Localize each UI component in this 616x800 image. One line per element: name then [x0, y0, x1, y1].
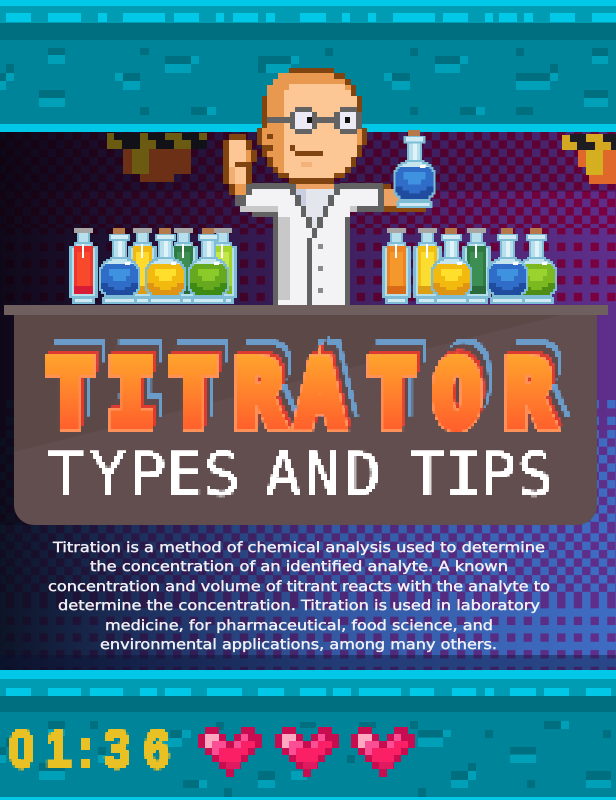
scientist forearm [383, 184, 426, 212]
faded block left [107, 133, 207, 182]
tall lime bottle [208, 228, 237, 304]
bright block right [562, 134, 616, 184]
intro paragraph: determine the concentration. Titration is used in laboratory [58, 598, 540, 614]
intro paragraph [48, 540, 550, 653]
yellow flask [431, 228, 472, 304]
bottom game band [0, 670, 616, 800]
scientist glasses [267, 107, 362, 134]
lab coat [235, 183, 384, 305]
heart: life one [198, 727, 262, 777]
timer 01:36: 01:36 [9, 719, 170, 779]
flask held by scientist [393, 130, 436, 208]
left bottles group [69, 228, 237, 304]
yellow flask [145, 228, 186, 304]
blue flask [487, 228, 528, 304]
tall dark green bottle [462, 228, 491, 304]
intro paragraph: Titration is a method of chemical analysis used to determine [52, 540, 545, 556]
subtitle: TYPES AND TIPS: TYPES AND TIPS [47, 440, 553, 510]
tall orange bottle [382, 228, 411, 304]
intro paragraph: medicine, for pharmaceutical, food science, and [105, 618, 493, 634]
green flask [516, 228, 557, 304]
tall yellow bottle [128, 228, 157, 304]
intro paragraph: concentration and volume of titrant reacts with the analyte to [48, 579, 550, 595]
heart: life three [351, 727, 415, 777]
tall red bottle [69, 228, 98, 304]
scientist raised hand [223, 134, 257, 195]
intro paragraph: environmental applications, among many others. [100, 637, 497, 653]
purple and blue checkered background [0, 132, 616, 670]
title: TITRATOR: TITRATOR [46, 342, 554, 447]
green flask [188, 228, 229, 304]
tall yellow bottle [413, 228, 442, 304]
scientist character [223, 68, 426, 305]
top game band [0, 0, 616, 132]
tall dark green bottle [169, 228, 198, 304]
scientist head [257, 68, 367, 184]
blue flask [99, 228, 140, 304]
intro paragraph: the concentration of an identified analyte. A known [90, 559, 508, 575]
counter panel [4, 305, 608, 525]
heart: life two [275, 727, 339, 777]
right bottles group [382, 228, 557, 304]
